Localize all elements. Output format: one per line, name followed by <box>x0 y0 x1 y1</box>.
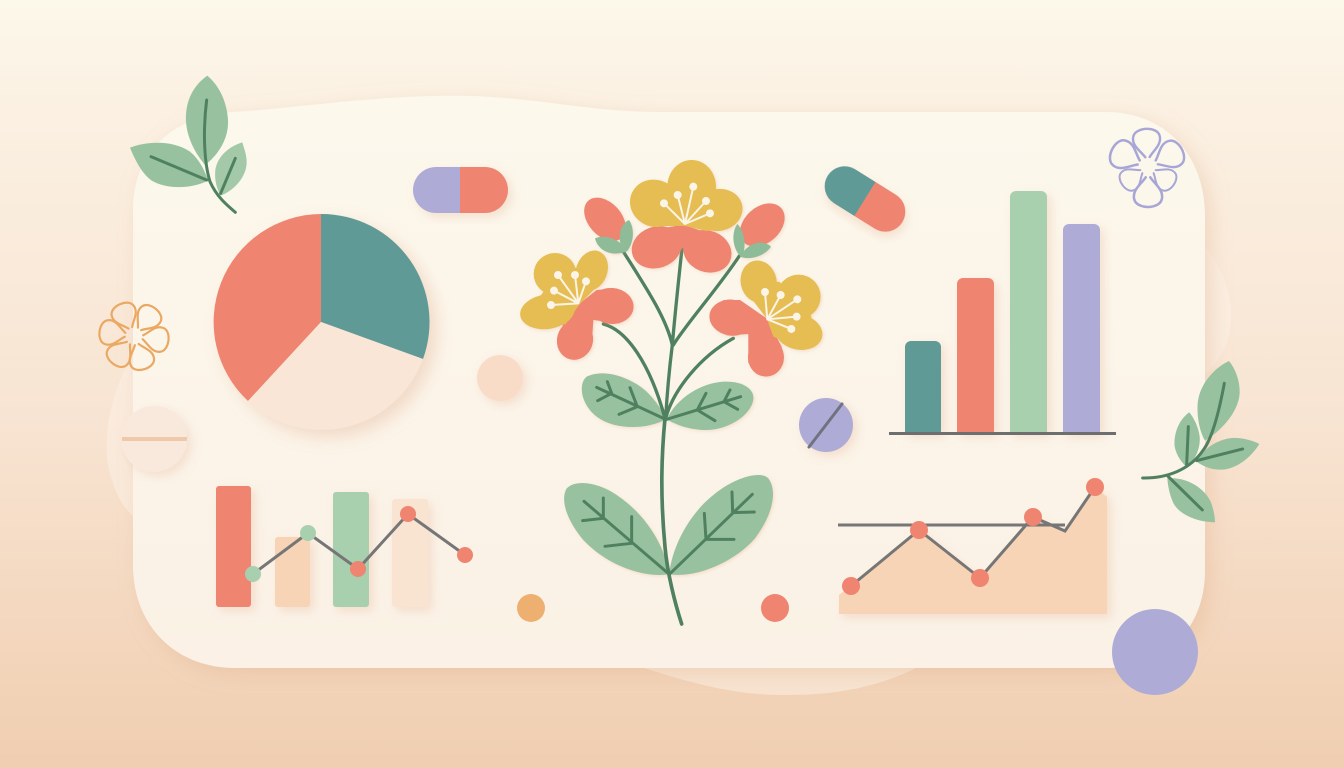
blossom: left <box>518 246 635 364</box>
icon: top-left leaf sprig <box>130 76 247 212</box>
bar: teal <box>905 341 941 433</box>
pie chart <box>214 214 430 430</box>
bud: left <box>576 190 634 254</box>
icon: peach dot <box>477 355 523 401</box>
flower plant: blossoms and upper stems <box>518 160 826 418</box>
combo chart: left <box>216 486 473 607</box>
upper stems <box>603 248 739 418</box>
icon: right leaf sprig <box>1143 361 1259 522</box>
main panel <box>133 96 1205 668</box>
icon: horizontal capsule <box>413 167 508 213</box>
area chart: right <box>838 478 1107 614</box>
flower plant: leaves and lower stem <box>564 373 773 624</box>
icon: purple scored tablet <box>799 398 853 452</box>
bar: green <box>1010 191 1047 433</box>
bud: right <box>731 195 793 258</box>
blossom: right <box>707 257 826 377</box>
blobs behind panel <box>107 243 1231 695</box>
icon: orange dot <box>517 594 545 622</box>
icon: tablet with score line <box>121 406 187 472</box>
bar chart: right <box>889 191 1116 435</box>
icon: large purple circle <box>1112 609 1198 695</box>
icon: orange outline flower <box>98 299 170 373</box>
icon: tilted capsule <box>817 159 913 239</box>
blossom: top <box>622 160 746 280</box>
bar: coral <box>957 278 994 433</box>
icon: purple outline flower <box>1106 128 1188 207</box>
icon: coral dot <box>761 594 789 622</box>
bar: purple <box>1063 224 1100 433</box>
